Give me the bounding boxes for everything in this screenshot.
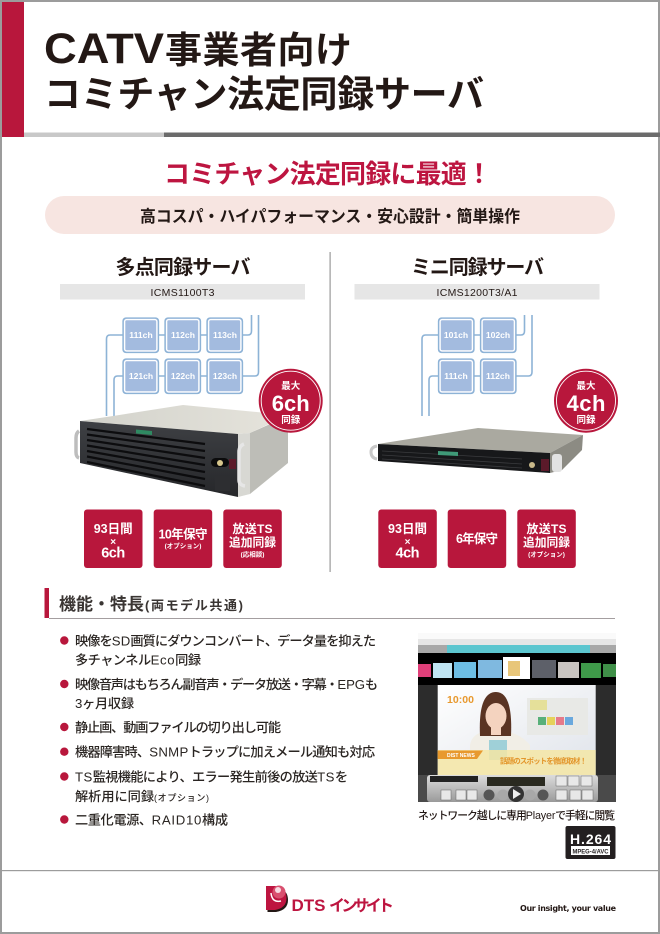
title: CATV — [44, 25, 164, 73]
list item: TS monitoring — [60, 768, 348, 804]
spec box: 93 days x 6ch: 93日間 — [94, 522, 133, 536]
list item: SD down-conversion — [60, 632, 376, 668]
pill: key benefits — [45, 196, 615, 234]
spec box: 93 days x 4ch — [378, 510, 437, 568]
news lower third: 話題のスポットを徹底取材！ — [500, 756, 587, 766]
server photo: 1U rack unit — [371, 428, 583, 473]
section heading: features: 機能・特長 — [59, 594, 144, 614]
spec box: 6 year maintenance: 6年保守 — [456, 531, 498, 546]
on-screen sticky notes picture — [527, 698, 588, 735]
title — [44, 25, 484, 115]
channel network diagram: 101ch — [444, 330, 468, 340]
title: 事業者向け — [165, 30, 352, 71]
pill: key benefits: 高コスパ・ハイパフォーマンス・安心設計・簡単操作 — [140, 206, 520, 226]
company logo — [266, 886, 394, 915]
badge: up to 4ch: 同録 — [576, 414, 596, 426]
list item: TS monitoring: (オプション) — [154, 793, 209, 803]
player screenshot: 10:00 — [447, 694, 474, 706]
screenshot caption: ネットワーク越しに専用Playerで手軽に閲覧 — [418, 808, 615, 822]
red headline: コミチャン法定同録に最適！ — [164, 159, 492, 189]
model bar: ICMS1200T3/A1 — [436, 287, 518, 299]
spec box: 10 year maintenance: (オプション) — [165, 542, 201, 550]
section heading: features: (両モデル共通) — [145, 598, 243, 613]
badge: up to 4ch — [554, 369, 618, 433]
news presenter — [470, 692, 530, 775]
list item: audio and data recording: 映像音声はもちろん副音声・データ放送・字幕・EPGも — [75, 676, 378, 692]
panel: multi-point recording server — [60, 256, 323, 568]
spec box: 93 days x 6ch: 6ch — [101, 546, 125, 562]
section heading: features — [44, 588, 615, 619]
model bar — [354, 284, 600, 300]
channel network diagram: 112ch — [486, 371, 510, 381]
list item: audio and data recording — [60, 676, 378, 711]
heading: multi-point server: 多点同録サーバ — [116, 256, 250, 279]
heading: mini server: ミニ同録サーバ — [411, 256, 544, 279]
channel network diagram: 121ch — [129, 371, 153, 381]
list item: SD down-conversion: 多チャンネルEco同録 — [75, 652, 201, 668]
spec box: additional broadcast TS recording option: 放送TS — [526, 521, 566, 536]
spec box: additional broadcast TS recording option: 追加同録 — [523, 536, 570, 550]
program thumbnails — [418, 657, 616, 679]
tagline: Our insight, your value — [520, 904, 617, 913]
spec box: additional broadcast TS recording — [223, 510, 282, 568]
list item: SNMP trap and mail: 機器障害時、SNMPトラップに加えメール通知も対応 — [75, 744, 375, 760]
badge: up to 6ch — [259, 369, 323, 433]
spec box: 6 year maintenance — [448, 510, 506, 568]
server photo: 3U rack unit — [76, 405, 288, 497]
panel: mini recording server — [354, 256, 618, 568]
spec box: 93 days x 6ch — [84, 510, 142, 568]
company logo: DTS — [292, 896, 326, 915]
model bar — [60, 284, 305, 300]
spec box: 10 year maintenance: 10年保守 — [158, 526, 208, 542]
codec badge: H.264: MPEG-4/AVC — [572, 848, 609, 856]
spec box: 93 days x 6ch: × — [110, 537, 116, 548]
spec box: 93 days x 4ch: 93日間 — [388, 522, 427, 536]
channel network diagram: 102ch — [486, 330, 510, 340]
badge: up to 4ch: 4ch — [566, 391, 606, 416]
list item: SD down-conversion: 映像をSD画質にダウンコンバート、データ量を抑えた — [75, 632, 376, 648]
channel network diagram: 123ch — [213, 371, 237, 381]
channel network diagram — [422, 315, 532, 416]
footer rule — [2, 870, 658, 871]
list item: stills and video export: 静止画、動画ファイルの切り出し可能 — [75, 719, 281, 735]
list item: audio and data recording: 3ヶ月収録 — [75, 696, 134, 711]
list item: TS monitoring: TS監視機能により、エラー発生前後の放送TSを — [75, 768, 348, 784]
spec box: additional broadcast TS recording: 放送TS — [232, 521, 272, 536]
header band — [2, 2, 660, 137]
channel network diagram: 111ch — [129, 330, 153, 340]
spec box: 10 year maintenance — [154, 510, 212, 568]
player screenshot — [418, 633, 616, 802]
channel network diagram: 111ch — [444, 371, 468, 381]
badge: up to 6ch: 6ch — [272, 391, 310, 416]
feature list — [60, 632, 378, 828]
title: コミチャン法定同録サーバ — [44, 74, 484, 115]
spec box: 93 days x 4ch: × — [405, 537, 411, 548]
spec box: additional broadcast TS recording option — [517, 510, 576, 568]
player controls — [418, 775, 616, 802]
model bar: ICMS1100T3 — [150, 287, 215, 299]
spec box: additional broadcast TS recording: 追加同録 — [229, 536, 276, 550]
channel network diagram: 113ch — [213, 330, 237, 340]
company logo: インサイト — [329, 897, 394, 915]
spec box: 93 days x 4ch: 4ch — [396, 546, 420, 562]
list item: redundancy: 二重化電源、RAID10構成 — [75, 812, 228, 828]
channel network diagram: 122ch — [171, 371, 195, 381]
badge: up to 6ch: 同録 — [281, 414, 301, 426]
badge: up to 4ch: 最大 — [576, 380, 596, 392]
channel network diagram: 112ch — [171, 330, 195, 340]
channel network diagram — [106, 315, 258, 416]
codec badge: H.264: H.264 — [570, 831, 611, 847]
codec badge: H.264 — [566, 826, 616, 859]
news lower third — [438, 750, 596, 775]
spec box: additional broadcast TS recording: (応相談) — [241, 550, 264, 558]
list item: TS monitoring: 解析用に同録 — [75, 788, 154, 804]
news lower third: DIST NEWS — [447, 753, 475, 759]
panel divider — [330, 252, 331, 572]
badge: up to 6ch: 最大 — [281, 380, 301, 392]
spec box: additional broadcast TS recording option: (オプション) — [528, 550, 565, 558]
